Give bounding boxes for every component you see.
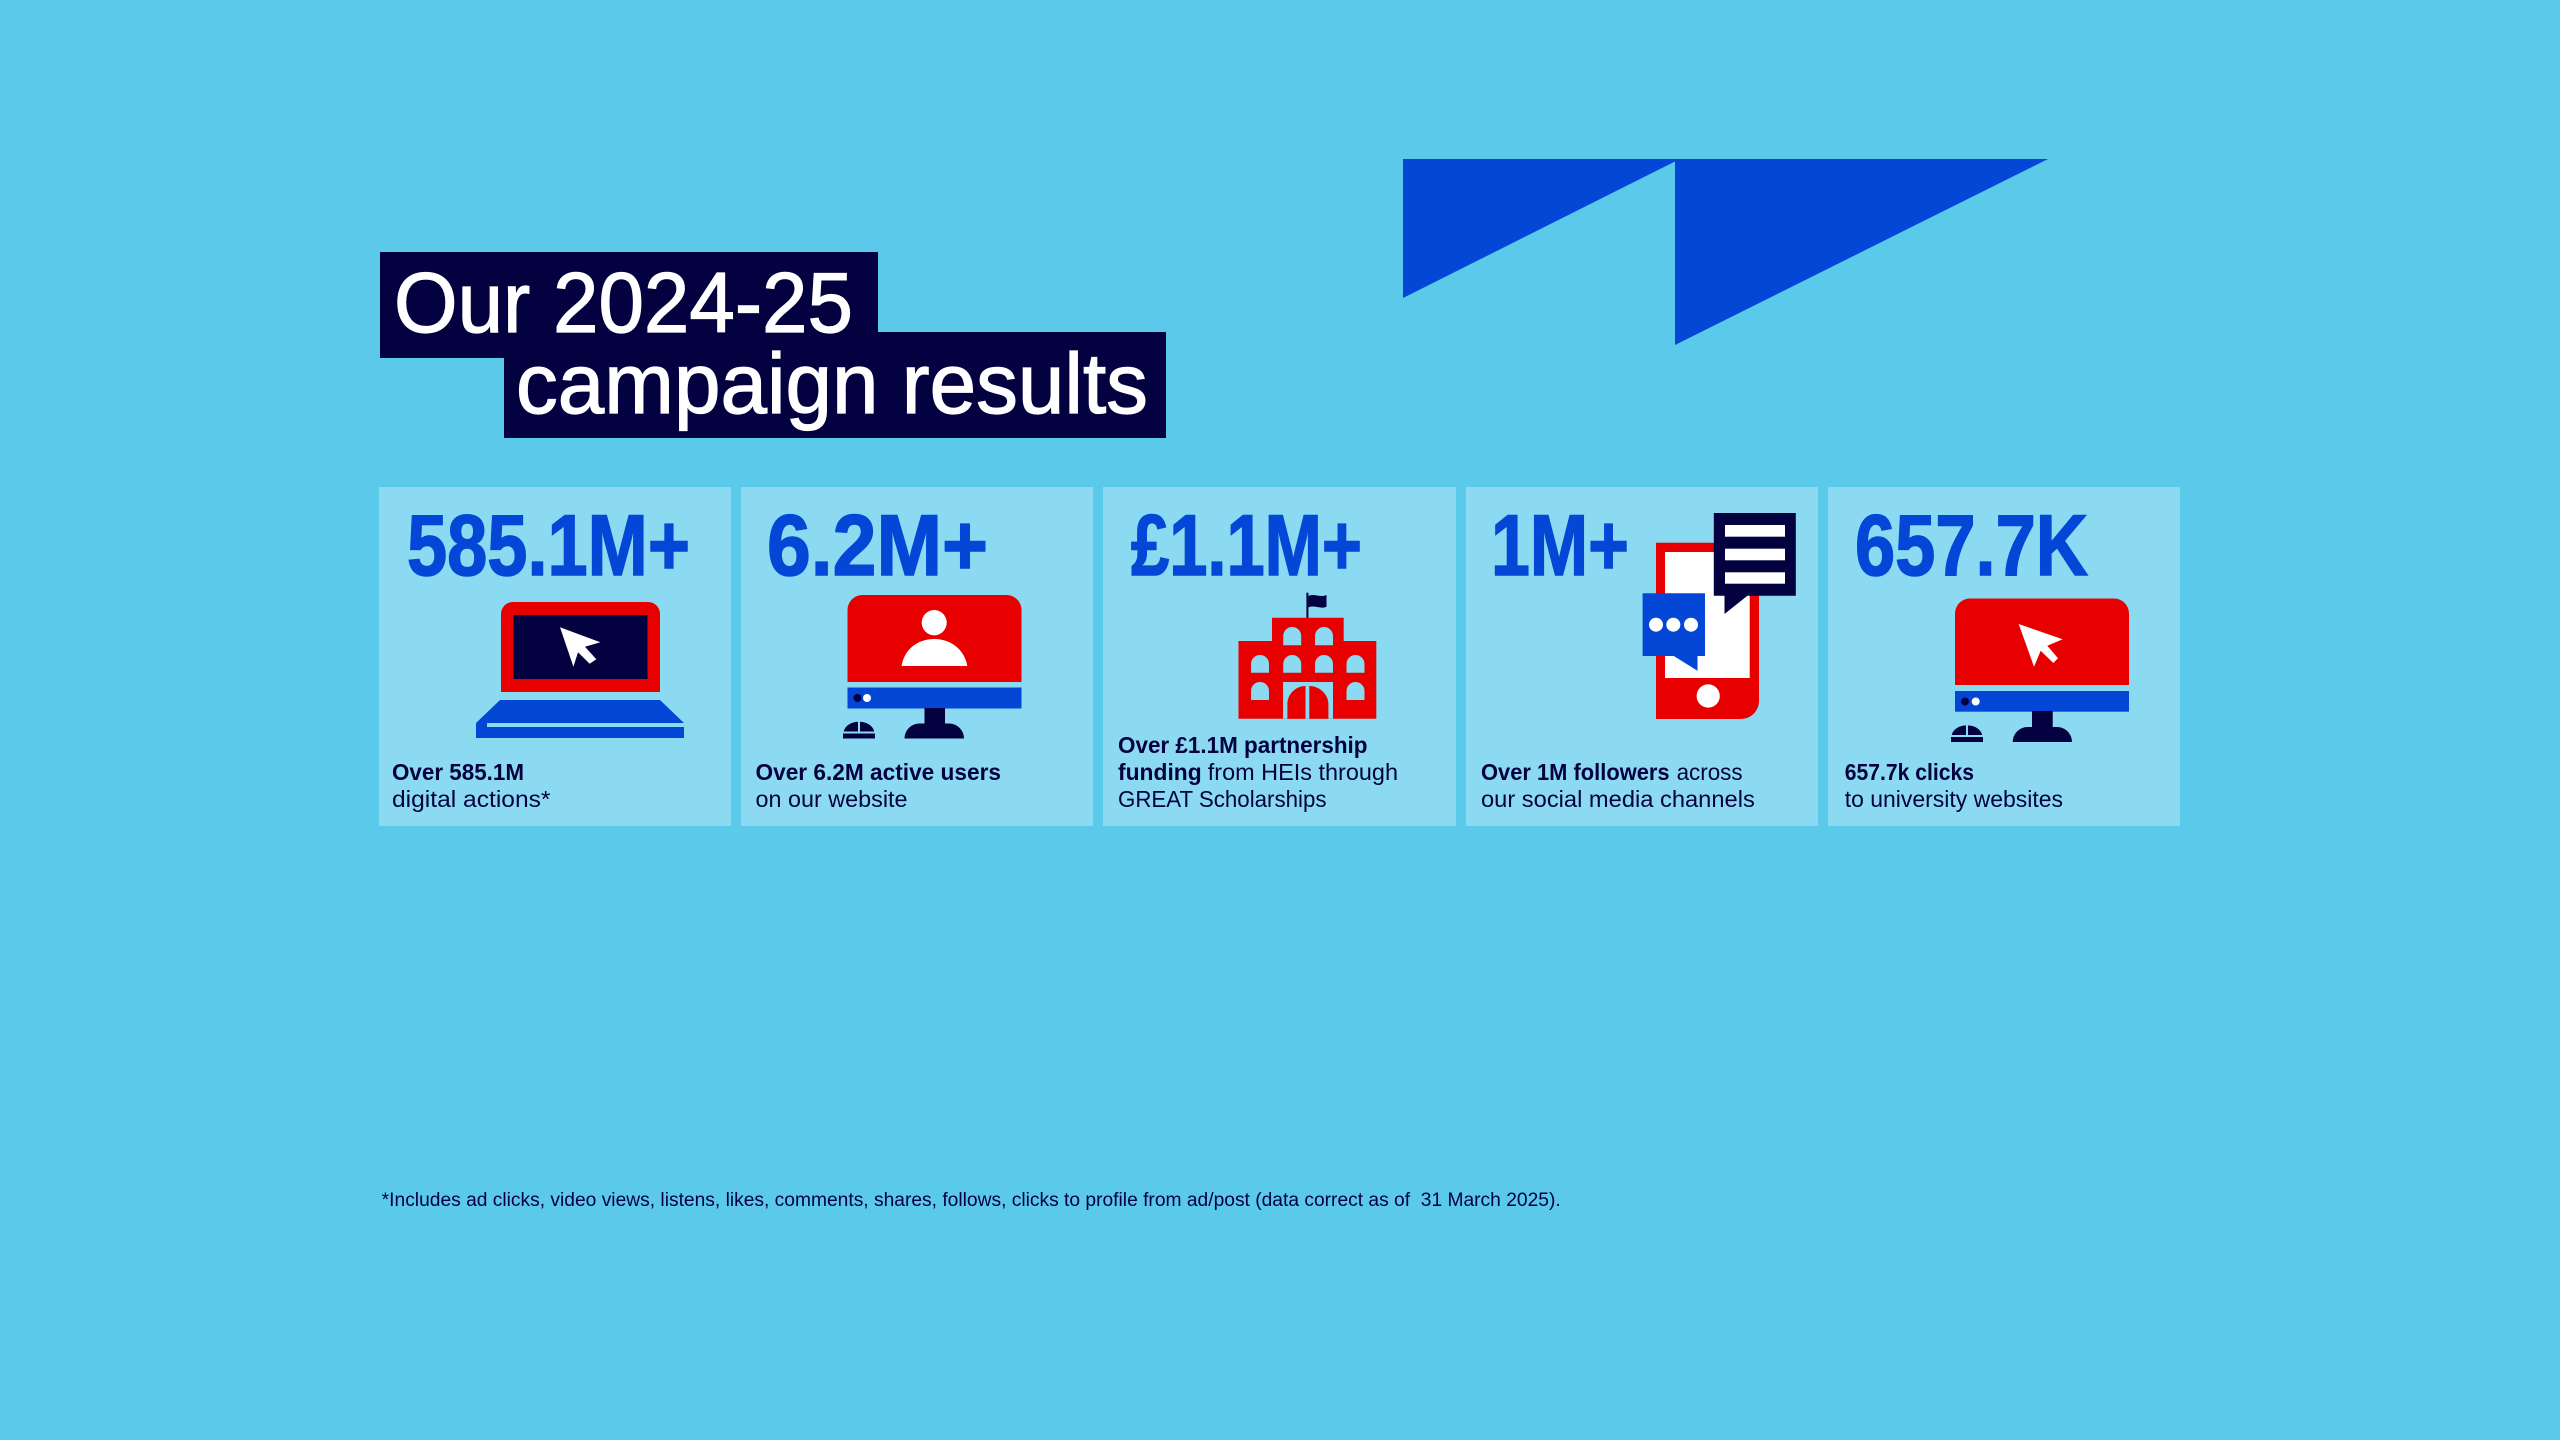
figure: £1.1M+: £1.1M+ bbox=[1131, 498, 1362, 594]
icon: desktop monitor with user bbox=[843, 595, 1022, 738]
caption bbox=[392, 759, 551, 812]
title: Our 2024-25 bbox=[394, 256, 853, 351]
decorative brand triangles bbox=[1403, 159, 2048, 345]
caption: from HEIs through bbox=[1208, 759, 1398, 785]
panel: digital actions bbox=[379, 487, 731, 826]
caption bbox=[1845, 759, 2063, 812]
caption: 657.7k clicks bbox=[1845, 759, 1974, 785]
panel: partnership funding bbox=[1103, 487, 1456, 826]
title bbox=[380, 252, 1166, 438]
title: campaign results bbox=[516, 337, 1148, 432]
icon: laptop with cursor bbox=[476, 602, 684, 738]
figure: 657.7K: 657.7K bbox=[1855, 498, 2088, 594]
caption: Over £1.1M partnership bbox=[1118, 732, 1368, 758]
caption: our social media channels bbox=[1481, 786, 1755, 812]
caption: GREAT Scholarships bbox=[1118, 786, 1326, 812]
caption: to university websites bbox=[1845, 786, 2063, 812]
figure: 585.1M+: 585.1M+ bbox=[407, 498, 690, 594]
caption bbox=[1481, 759, 1755, 812]
panel: active users bbox=[741, 487, 1093, 826]
footnote: *Includes ad clicks, video views, listens, likes, comments, shares, follows, clicks to profile from ad/post (data correct as of 31 March 2025). bbox=[382, 1190, 1561, 1211]
icon: desktop monitor with cursor bbox=[1951, 598, 2129, 742]
caption: funding bbox=[1118, 759, 1202, 785]
panel: social followers bbox=[1466, 487, 1818, 826]
figure: 1M+: 1M+ bbox=[1491, 498, 1629, 594]
caption: digital actions* bbox=[392, 786, 551, 812]
figure: 6.2M+: 6.2M+ bbox=[767, 498, 988, 594]
caption bbox=[1118, 732, 1398, 812]
icon: phone with chat bubbles bbox=[1643, 513, 1796, 719]
caption bbox=[756, 759, 1001, 812]
icon: university building bbox=[1238, 593, 1376, 719]
caption: Over 585.1M bbox=[392, 759, 524, 785]
panel: university clicks bbox=[1828, 487, 2180, 826]
caption: across bbox=[1677, 759, 1743, 785]
caption: on our website bbox=[756, 786, 908, 812]
caption: Over 1M followers bbox=[1481, 759, 1670, 785]
caption: Over 6.2M active users bbox=[756, 759, 1001, 785]
